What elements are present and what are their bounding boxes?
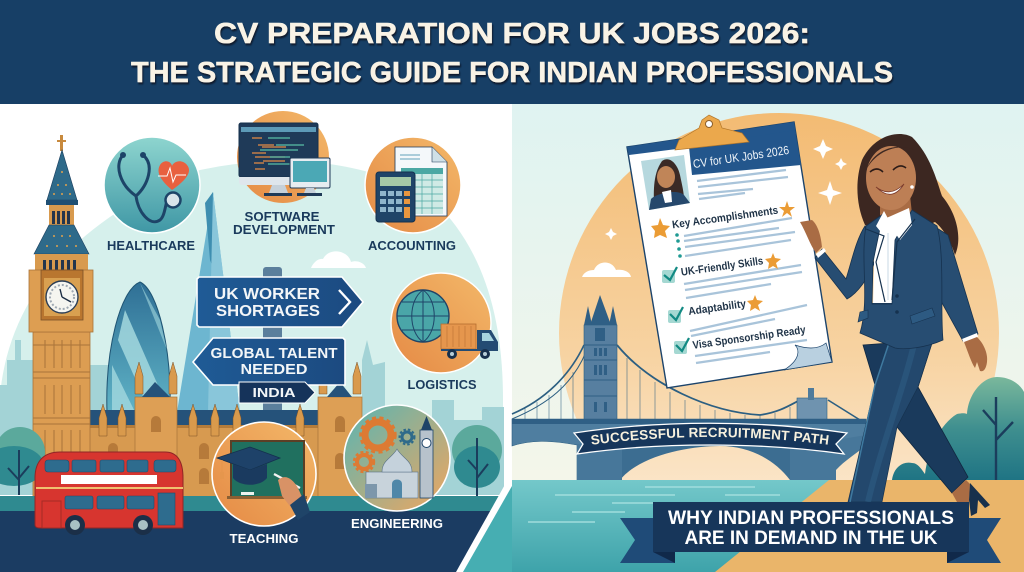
- banner: why indian professionals: WHY INDIAN PROFESSIONALS: [668, 508, 954, 529]
- icon: sparkles: [605, 139, 847, 240]
- waistband: [872, 303, 896, 315]
- left hand: [800, 220, 822, 253]
- tree right: [452, 425, 502, 497]
- label: healthcare: HEALTHCARE: [107, 238, 195, 253]
- hair: [857, 134, 958, 255]
- sign: global talent needed: GLOBAL TALENT: [210, 346, 338, 362]
- panel: left background: [0, 104, 512, 572]
- title: CV for UK Jobs 2026: [692, 143, 790, 171]
- label: engineering: ENGINEERING: [351, 517, 443, 531]
- icon: teaching: [212, 422, 316, 526]
- icon: engineering: [344, 405, 450, 511]
- clip: [675, 115, 749, 150]
- title text: CV PREPARATION FOR UK JOBS 2026:: [214, 18, 810, 50]
- adaptability: Adaptability: [688, 298, 747, 318]
- icon: healthcare: [104, 137, 200, 233]
- tower bridge: [512, 295, 875, 480]
- title text: THE STRATEGIC GUIDE FOR INDIAN PROFESSIONALS: [131, 57, 893, 89]
- distant skyline: [0, 340, 504, 495]
- face features: [870, 166, 906, 194]
- front leg: [848, 340, 933, 502]
- title text: [131, 18, 893, 89]
- photo: [641, 155, 690, 210]
- CV clipboard: [627, 115, 832, 388]
- panel divider and water corner: [456, 472, 512, 572]
- icon: logistics: [391, 273, 498, 373]
- banner: successful recruitment path: [572, 422, 848, 455]
- label: teaching: TEACHING: [230, 532, 298, 546]
- neck: [880, 195, 912, 238]
- trees right panel: [892, 377, 1024, 480]
- ground and road: [0, 496, 512, 572]
- tree left: [0, 427, 45, 495]
- woman in suit: [800, 134, 990, 516]
- icon: accounting: [365, 137, 461, 233]
- suspension cables: [512, 345, 860, 420]
- key accomplishments: [651, 201, 795, 238]
- lapels: [866, 219, 915, 302]
- red double decker bus: [35, 452, 183, 535]
- tower left: [584, 295, 617, 420]
- label: software development: DEVELOPMENT: [233, 223, 335, 237]
- label: accounting: ACCOUNTING: [368, 238, 456, 253]
- page curl: [784, 343, 832, 370]
- banner: why indian professionals: [620, 502, 1001, 563]
- tower right: [797, 388, 827, 420]
- text lines: [684, 170, 807, 363]
- sign: UK worker shortages: [197, 277, 363, 327]
- header band: [689, 130, 801, 175]
- label: software development: SOFTWARE: [244, 210, 320, 224]
- sign: UK worker shortages: UK WORKER: [214, 286, 320, 303]
- water: [512, 480, 852, 572]
- deck and arches: [512, 419, 875, 480]
- sign: India: [239, 382, 315, 403]
- right hand: [964, 337, 987, 371]
- gherkin tower: [107, 282, 170, 412]
- ankle and shoe: [952, 480, 990, 516]
- signpost pole: [263, 267, 282, 432]
- banner: successful recruitment path: SUCCESSFUL RECRUITMENT PATH: [591, 428, 829, 445]
- shirt: [873, 208, 909, 305]
- sign: UK worker shortages: SHORTAGES: [216, 303, 320, 320]
- icon: heart: [158, 161, 189, 190]
- panel: right background: [512, 104, 1024, 480]
- banner: why indian professionals: ARE IN DEMAND IN THE UK: [684, 528, 938, 549]
- right arm: [925, 225, 978, 341]
- key accomplishments: Key Accomplishments: [671, 205, 779, 231]
- sand path: [715, 480, 1024, 572]
- sign: India: INDIA: [252, 385, 296, 400]
- stethoscope: [119, 155, 168, 222]
- jacket torso: [860, 210, 943, 349]
- face: [866, 146, 916, 210]
- back leg: [863, 340, 968, 493]
- title band: [0, 0, 1024, 104]
- icon: software development: [237, 111, 330, 203]
- sign: global talent needed: NEEDED: [240, 362, 308, 378]
- visa sponsorship ready: Visa Sponsorship Ready: [692, 324, 807, 352]
- paper: [627, 122, 832, 388]
- adaptability: [668, 295, 763, 323]
- icon: cloud left: [311, 251, 366, 268]
- label: software development: [233, 210, 335, 237]
- icon: clock face: [46, 281, 78, 313]
- uk-friendly skills: UK-Friendly Skills: [680, 255, 764, 279]
- shard tower: [177, 192, 240, 412]
- parliament building: [90, 362, 362, 498]
- bullets: [675, 233, 682, 258]
- collar: [876, 211, 892, 236]
- left arm: [815, 226, 874, 299]
- label: logistics: LOGISTICS: [408, 378, 476, 392]
- big ben tower: [29, 135, 93, 498]
- icon: cloud right: [582, 262, 631, 277]
- sign: global talent needed: [193, 338, 345, 385]
- visa sponsorship ready: [674, 324, 807, 354]
- uk-friendly skills: [662, 253, 781, 283]
